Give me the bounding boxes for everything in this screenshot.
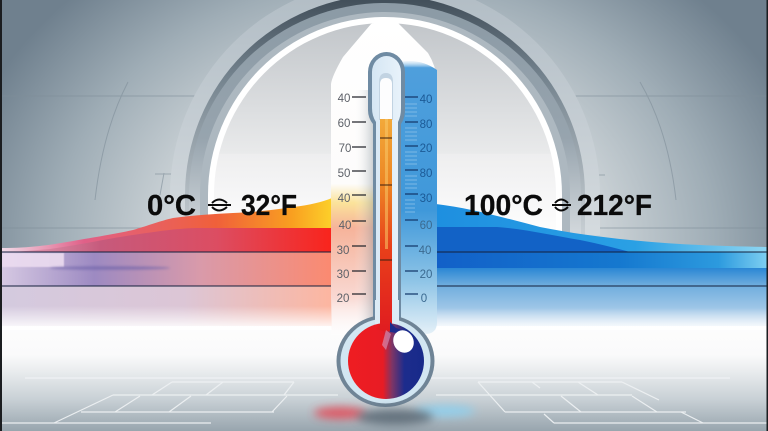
right scale numbers: 30 [420,193,432,205]
right scale numbers lower: 0 [421,293,427,305]
left scale [337,93,366,305]
tube: bore [380,78,392,130]
right band: mid blue [436,252,768,271]
bulb shadow: blue [415,405,475,417]
lower floor background [0,300,768,431]
right scale numbers: 80 [420,119,432,131]
symbol: equivalent [552,200,571,210]
left band: middle gradient [2,252,332,287]
tube: bore shadow [379,73,393,120]
left band: white fade [2,306,332,330]
right scale numbers [420,94,432,205]
equivalence right: 100°C = 212°F [464,190,652,222]
tube: mercury sheen [385,119,388,249]
arch: dark ring [185,0,585,235]
tube: mercury marks [380,138,392,260]
left scale numbers: 20 [337,293,349,305]
scale panel: left shading [331,90,373,325]
right scale numbers lower: 20 [420,269,432,281]
left scale numbers: 30 [337,269,349,281]
tube: mercury column [376,119,396,332]
wall guide lines [2,82,768,228]
right scale numbers: 80 [420,168,432,180]
bulb: liquid [348,323,424,399]
scale panel: white back [331,21,437,335]
left scale numbers: 40 [339,220,351,232]
arch: inner wall [214,23,556,240]
left scale numbers: 50 [338,168,350,180]
left scale numbers: 30 [337,245,349,257]
tube: outer casing [368,52,405,322]
arch: white inner ring [208,17,562,240]
thermometer [331,21,437,407]
right scale [405,94,432,305]
tube: blue liquid edge [390,322,410,335]
right scale numbers lower: 60 [420,220,432,232]
right scale ticks [405,97,418,294]
label: 212°F: 212°F [577,190,652,222]
scale panel: fine ruler ticks [405,104,417,212]
arch [170,0,600,240]
label: 32°F: 32°F [241,190,297,222]
right band: white fade [436,308,768,330]
left band: pale stripe [2,253,64,267]
arch: mid ring [189,3,581,235]
tube: glass [372,56,401,324]
right colour band [436,204,768,330]
left band: wave crest [2,198,332,253]
scale panel: right [400,61,437,334]
right scale numbers lower [419,220,432,305]
bulb shadow: dark [357,409,433,425]
left scale numbers: 60 [338,118,350,130]
left scale numbers [337,93,351,305]
arch: light ring step [200,12,570,235]
left colour band [2,198,332,330]
symbol: equivalent [208,200,231,210]
band rules [2,252,768,286]
equivalence left: 0°C = 32°F [147,190,297,222]
bulb: glass [340,318,430,404]
left scale ticks [352,97,366,294]
left scale numbers: 70 [339,143,351,155]
left scale numbers: 40 [338,193,350,205]
right scale numbers: 40 [420,94,432,106]
bulb shadow: red [314,407,366,419]
tube: neck join [375,300,399,326]
right scale numbers lower: 40 [419,245,431,257]
bulb: outer casing [336,315,434,407]
left band: lower gradient [2,286,332,326]
arch: outer pale ring [170,0,600,235]
label: 100°C: 100°C [464,190,543,222]
right band: lower fade [436,268,768,326]
bulb: highlight [390,327,417,356]
left band: purple shadow [50,266,170,270]
floor grid lines [2,378,768,423]
left scale numbers: 40 [338,93,350,105]
right band: wave crest [436,204,768,268]
label: 0°C: 0°C [147,190,196,222]
bulb: inner glint [382,330,391,350]
left band: red body [2,228,332,253]
right band: deep blue body [436,227,630,268]
right scale numbers: 20 [420,143,432,155]
